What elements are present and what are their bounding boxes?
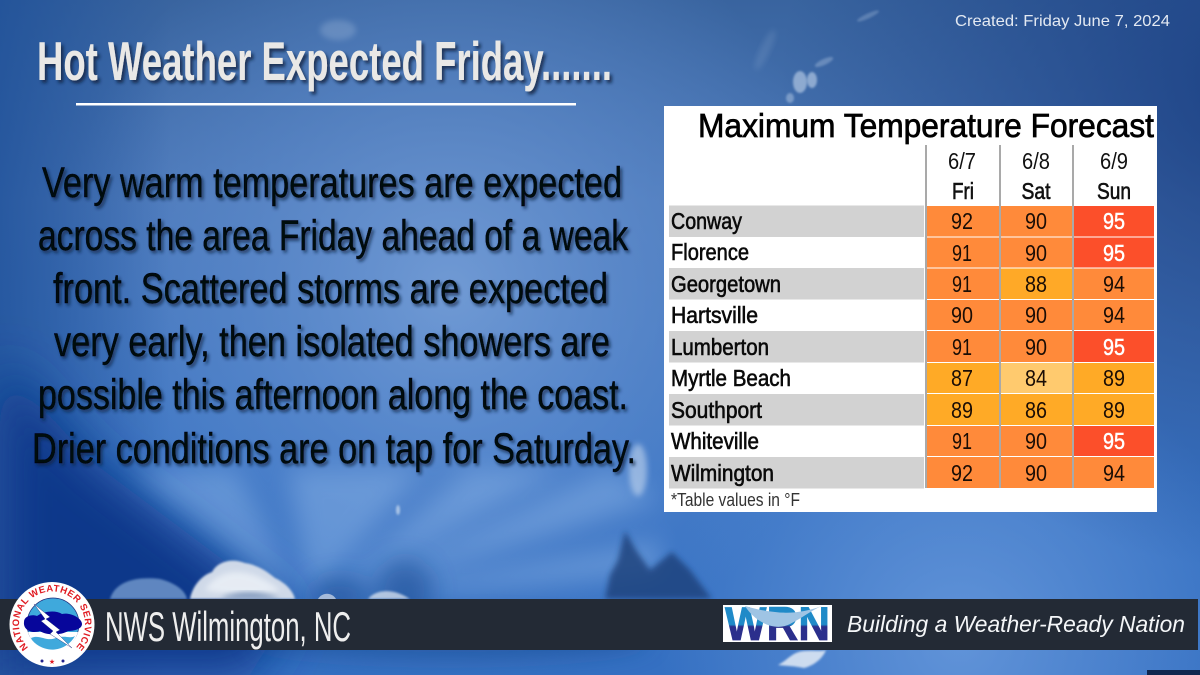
column headers: Sat bbox=[1022, 178, 1051, 204]
row bands bbox=[669, 206, 924, 488]
temperature values: 91 bbox=[952, 428, 972, 454]
office name: NWS Wilmington, NC bbox=[105, 603, 351, 650]
table footnote: *Table values in °F bbox=[671, 490, 800, 510]
body text: possible this afternoon along the coast. bbox=[38, 371, 628, 419]
temperature values: 90 bbox=[1025, 208, 1047, 234]
city names: Southport bbox=[671, 397, 763, 423]
column headers: 6/9 bbox=[1100, 148, 1128, 174]
title underline bbox=[76, 103, 576, 106]
body text: front. Scattered storms are expected bbox=[53, 265, 608, 313]
temperature values: 94 bbox=[1103, 302, 1125, 328]
city names bbox=[671, 208, 791, 486]
panel: maximum temperature table bbox=[664, 106, 1157, 512]
city names: Georgetown bbox=[671, 271, 781, 297]
temperature values: 91 bbox=[952, 271, 972, 297]
footer bar bbox=[0, 599, 1198, 650]
temperature values: 91 bbox=[952, 334, 972, 360]
slogan: Building a Weather-Ready Nation bbox=[847, 611, 1185, 637]
wispy clouds bbox=[320, 9, 880, 668]
city names: Hartsville bbox=[671, 302, 758, 328]
body text: Drier conditions are on tap for Saturday. bbox=[32, 425, 636, 473]
city names: Myrtle Beach bbox=[671, 365, 791, 391]
temperature values: 89 bbox=[1103, 365, 1125, 391]
temperature values: 92 bbox=[951, 460, 973, 486]
column headers: 6/8 bbox=[1022, 148, 1050, 174]
column headers: 6/7 bbox=[948, 148, 976, 174]
temperature values bbox=[951, 208, 1125, 486]
temperature values: 89 bbox=[1103, 397, 1125, 423]
column headers bbox=[948, 148, 1131, 204]
table heading: Maximum Temperature Forecast bbox=[698, 107, 1154, 144]
temperature cells bbox=[927, 206, 1154, 488]
temperature values: 95 bbox=[1103, 334, 1125, 360]
temperature values: 88 bbox=[1025, 271, 1047, 297]
temperature values: 95 bbox=[1103, 208, 1125, 234]
temperature values: 90 bbox=[1025, 302, 1047, 328]
temperature values: 95 bbox=[1103, 240, 1125, 266]
body text bbox=[32, 159, 636, 473]
body text: Very warm temperatures are expected bbox=[42, 159, 622, 207]
column headers: Sun bbox=[1097, 178, 1131, 204]
column headers: Fri bbox=[952, 178, 974, 204]
temperature values: 89 bbox=[951, 397, 973, 423]
lit cumulus cloud bbox=[110, 561, 410, 599]
created date: Created: Friday June 7, 2024 bbox=[955, 13, 1170, 30]
temperature values: 94 bbox=[1103, 460, 1125, 486]
temperature values: 95 bbox=[1103, 428, 1125, 454]
icon: NWS logo: ★ bbox=[49, 658, 55, 666]
city names: Florence bbox=[671, 239, 749, 265]
temperature values: 90 bbox=[1025, 240, 1047, 266]
icon: WRN logo: WRN bbox=[725, 597, 830, 650]
dark cloud right bbox=[605, 531, 712, 599]
temperature values: 94 bbox=[1103, 271, 1125, 297]
body text: very early, then isolated showers are bbox=[54, 318, 610, 366]
icon: NWS logo: NATIONAL WEATHER SERVICE bbox=[12, 584, 92, 652]
city names: Lumberton bbox=[671, 334, 769, 360]
temperature values: 86 bbox=[1025, 397, 1047, 423]
temperature values: 90 bbox=[1025, 334, 1047, 360]
temperature values: 92 bbox=[951, 208, 973, 234]
city names: Conway bbox=[671, 208, 742, 234]
temperature values: 90 bbox=[1025, 460, 1047, 486]
temperature values: 91 bbox=[952, 240, 972, 266]
temperature values: 87 bbox=[951, 365, 973, 391]
title: Hot Weather Expected Friday....... bbox=[37, 30, 612, 92]
temperature values: 84 bbox=[1025, 365, 1047, 391]
grid separators bbox=[925, 145, 927, 488]
city names: Wilmington bbox=[671, 460, 774, 486]
body text: across the area Friday ahead of a weak bbox=[38, 212, 628, 260]
city names: Whiteville bbox=[671, 428, 759, 454]
temperature values: 90 bbox=[1025, 428, 1047, 454]
temperature values: 90 bbox=[951, 302, 973, 328]
